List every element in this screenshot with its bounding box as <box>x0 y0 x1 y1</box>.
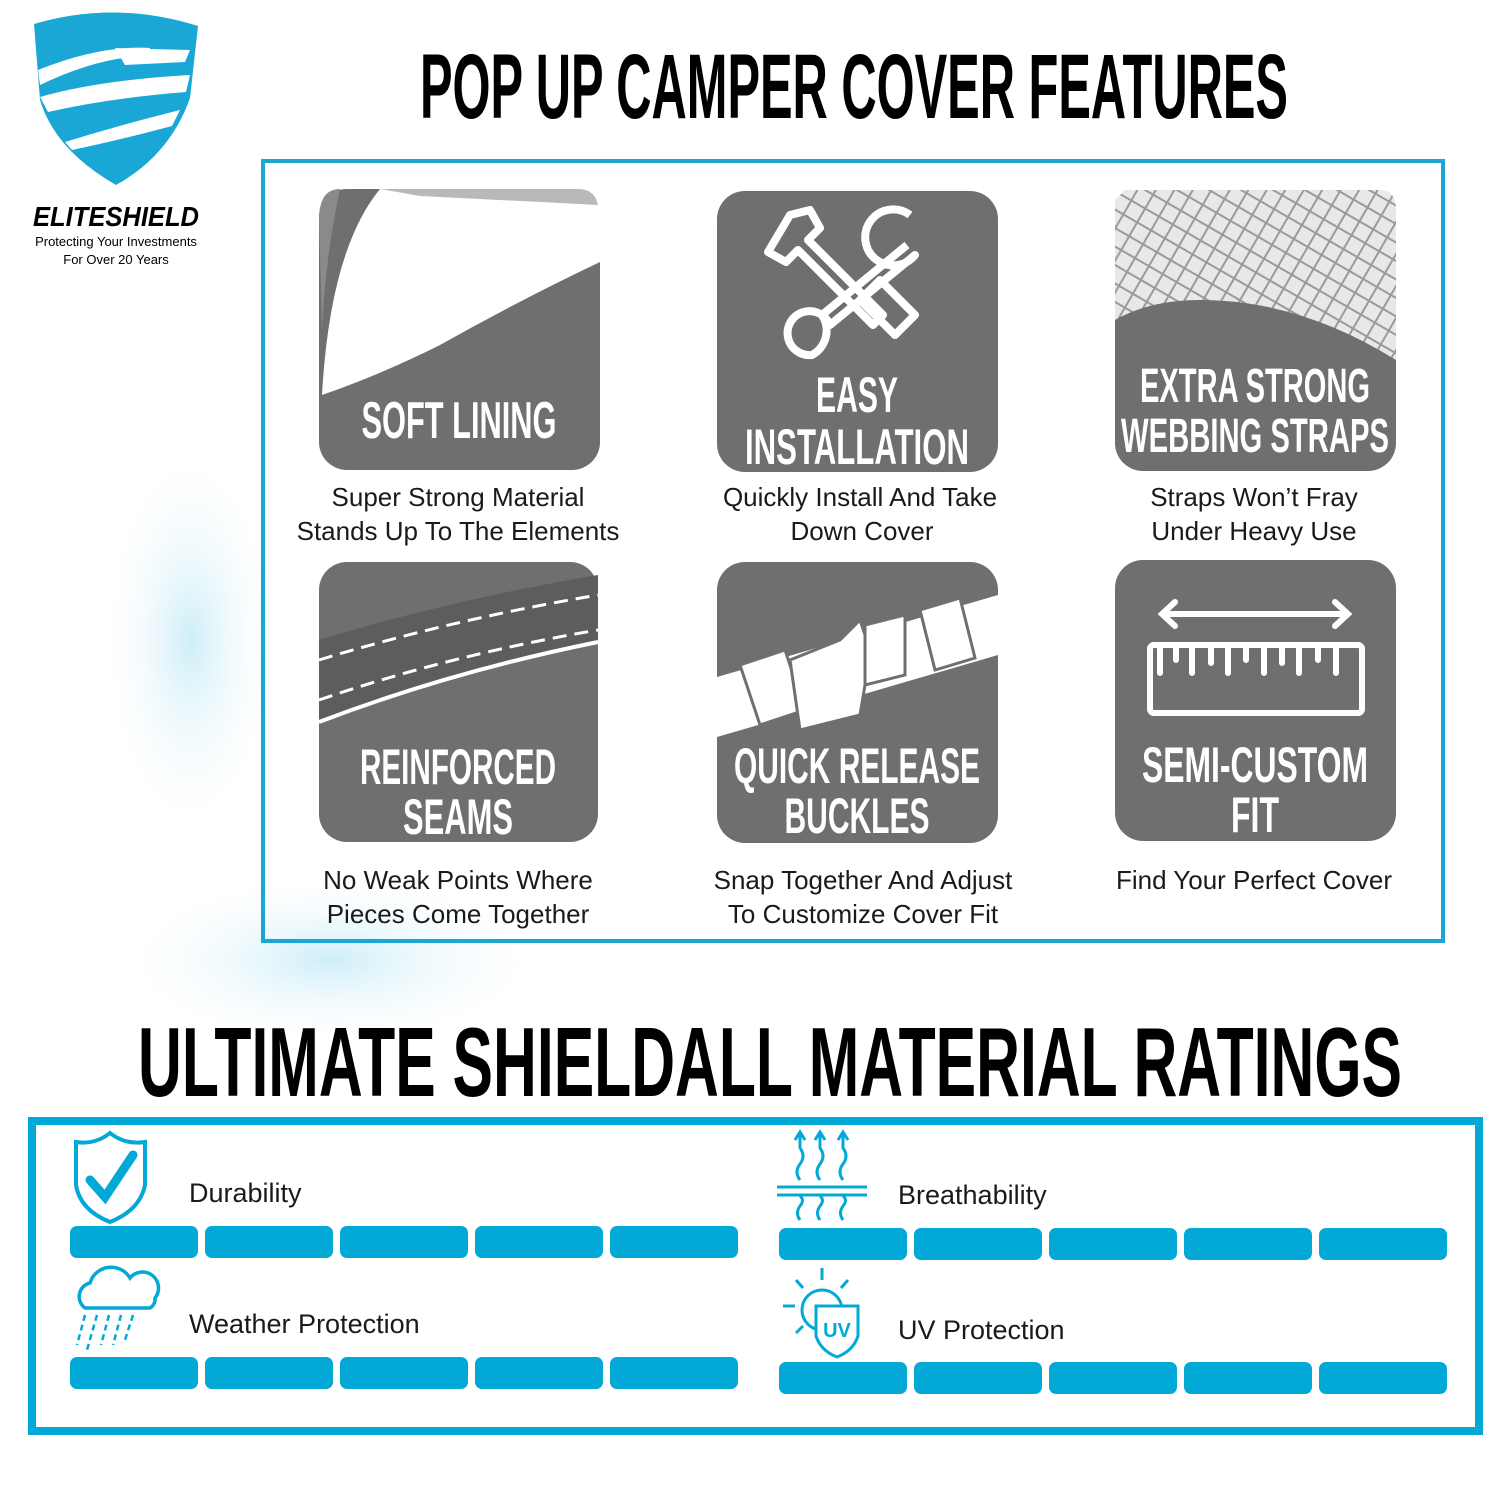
captions: Quickly Install And Take <box>723 482 997 512</box>
logo: For Over 20 Years <box>63 252 169 267</box>
tile: soft lining <box>319 189 600 470</box>
tile: reinforced seams: REINFORCED <box>360 739 556 795</box>
captions: Find Your Perfect Cover <box>1116 865 1392 895</box>
label: breathability: Breathability <box>898 1180 1047 1210</box>
tile: reinforced seams <box>319 562 598 845</box>
bars: durability <box>70 1226 738 1258</box>
icon: uv <box>783 1268 858 1357</box>
bars: breathability <box>779 1228 1447 1260</box>
label: weather protection: Weather Protection <box>189 1309 420 1339</box>
tile: soft lining: SOFT LINING <box>362 392 556 450</box>
background glow <box>100 440 550 1050</box>
icon: cloud rain <box>77 1267 159 1350</box>
bars: uv <box>779 1362 1447 1394</box>
logo tagline: Protecting Your Investments <box>35 234 197 249</box>
icon: shield check <box>76 1133 145 1222</box>
captions: No Weak Points Where <box>323 865 593 895</box>
tile: quick release buckles: BUCKLES <box>784 788 930 844</box>
captions: Stands Up To The Elements <box>297 516 619 546</box>
logo <box>33 12 199 267</box>
captions: Super Strong Material <box>332 482 584 512</box>
tile: easy installation: EASY <box>816 367 898 423</box>
tile: easy installation: INSTALLATION <box>745 419 969 475</box>
captions: To Customize Cover Fit <box>728 899 999 929</box>
icon: breathability <box>777 1132 867 1220</box>
captions: Under Heavy Use <box>1151 516 1357 546</box>
panel: ratings <box>32 1121 1479 1431</box>
icon: tools <box>768 209 915 355</box>
tile: semi-custom fit: SEMI-CUSTOM <box>1142 737 1368 793</box>
logo name: ELITESHIELD <box>33 201 199 232</box>
captions: Down Cover <box>790 516 934 546</box>
icon: shield <box>34 12 198 185</box>
icon: ruler <box>1150 602 1362 713</box>
tile: reinforced seams: SEAMS <box>403 789 513 845</box>
panel: features <box>263 161 1443 941</box>
tile: quick release buckles: QUICK RELEASE <box>734 738 980 794</box>
tile: quick release buckles <box>717 562 998 844</box>
label: uv protection: UV Protection <box>898 1315 1065 1345</box>
tile: extra strong webbing straps <box>1115 190 1396 471</box>
tile: semi-custom fit: FIT <box>1231 787 1279 843</box>
tile: easy installation <box>717 191 998 475</box>
captions: Straps Won’t Fray <box>1150 482 1358 512</box>
label: durability: Durability <box>189 1178 302 1208</box>
captions: Pieces Come Together <box>327 899 590 929</box>
bars: weather <box>70 1357 738 1389</box>
tile: semi-custom fit <box>1115 560 1396 843</box>
icon: uv: UV <box>823 1320 852 1342</box>
captions: Snap Together And Adjust <box>714 865 1013 895</box>
captions <box>297 482 1392 929</box>
